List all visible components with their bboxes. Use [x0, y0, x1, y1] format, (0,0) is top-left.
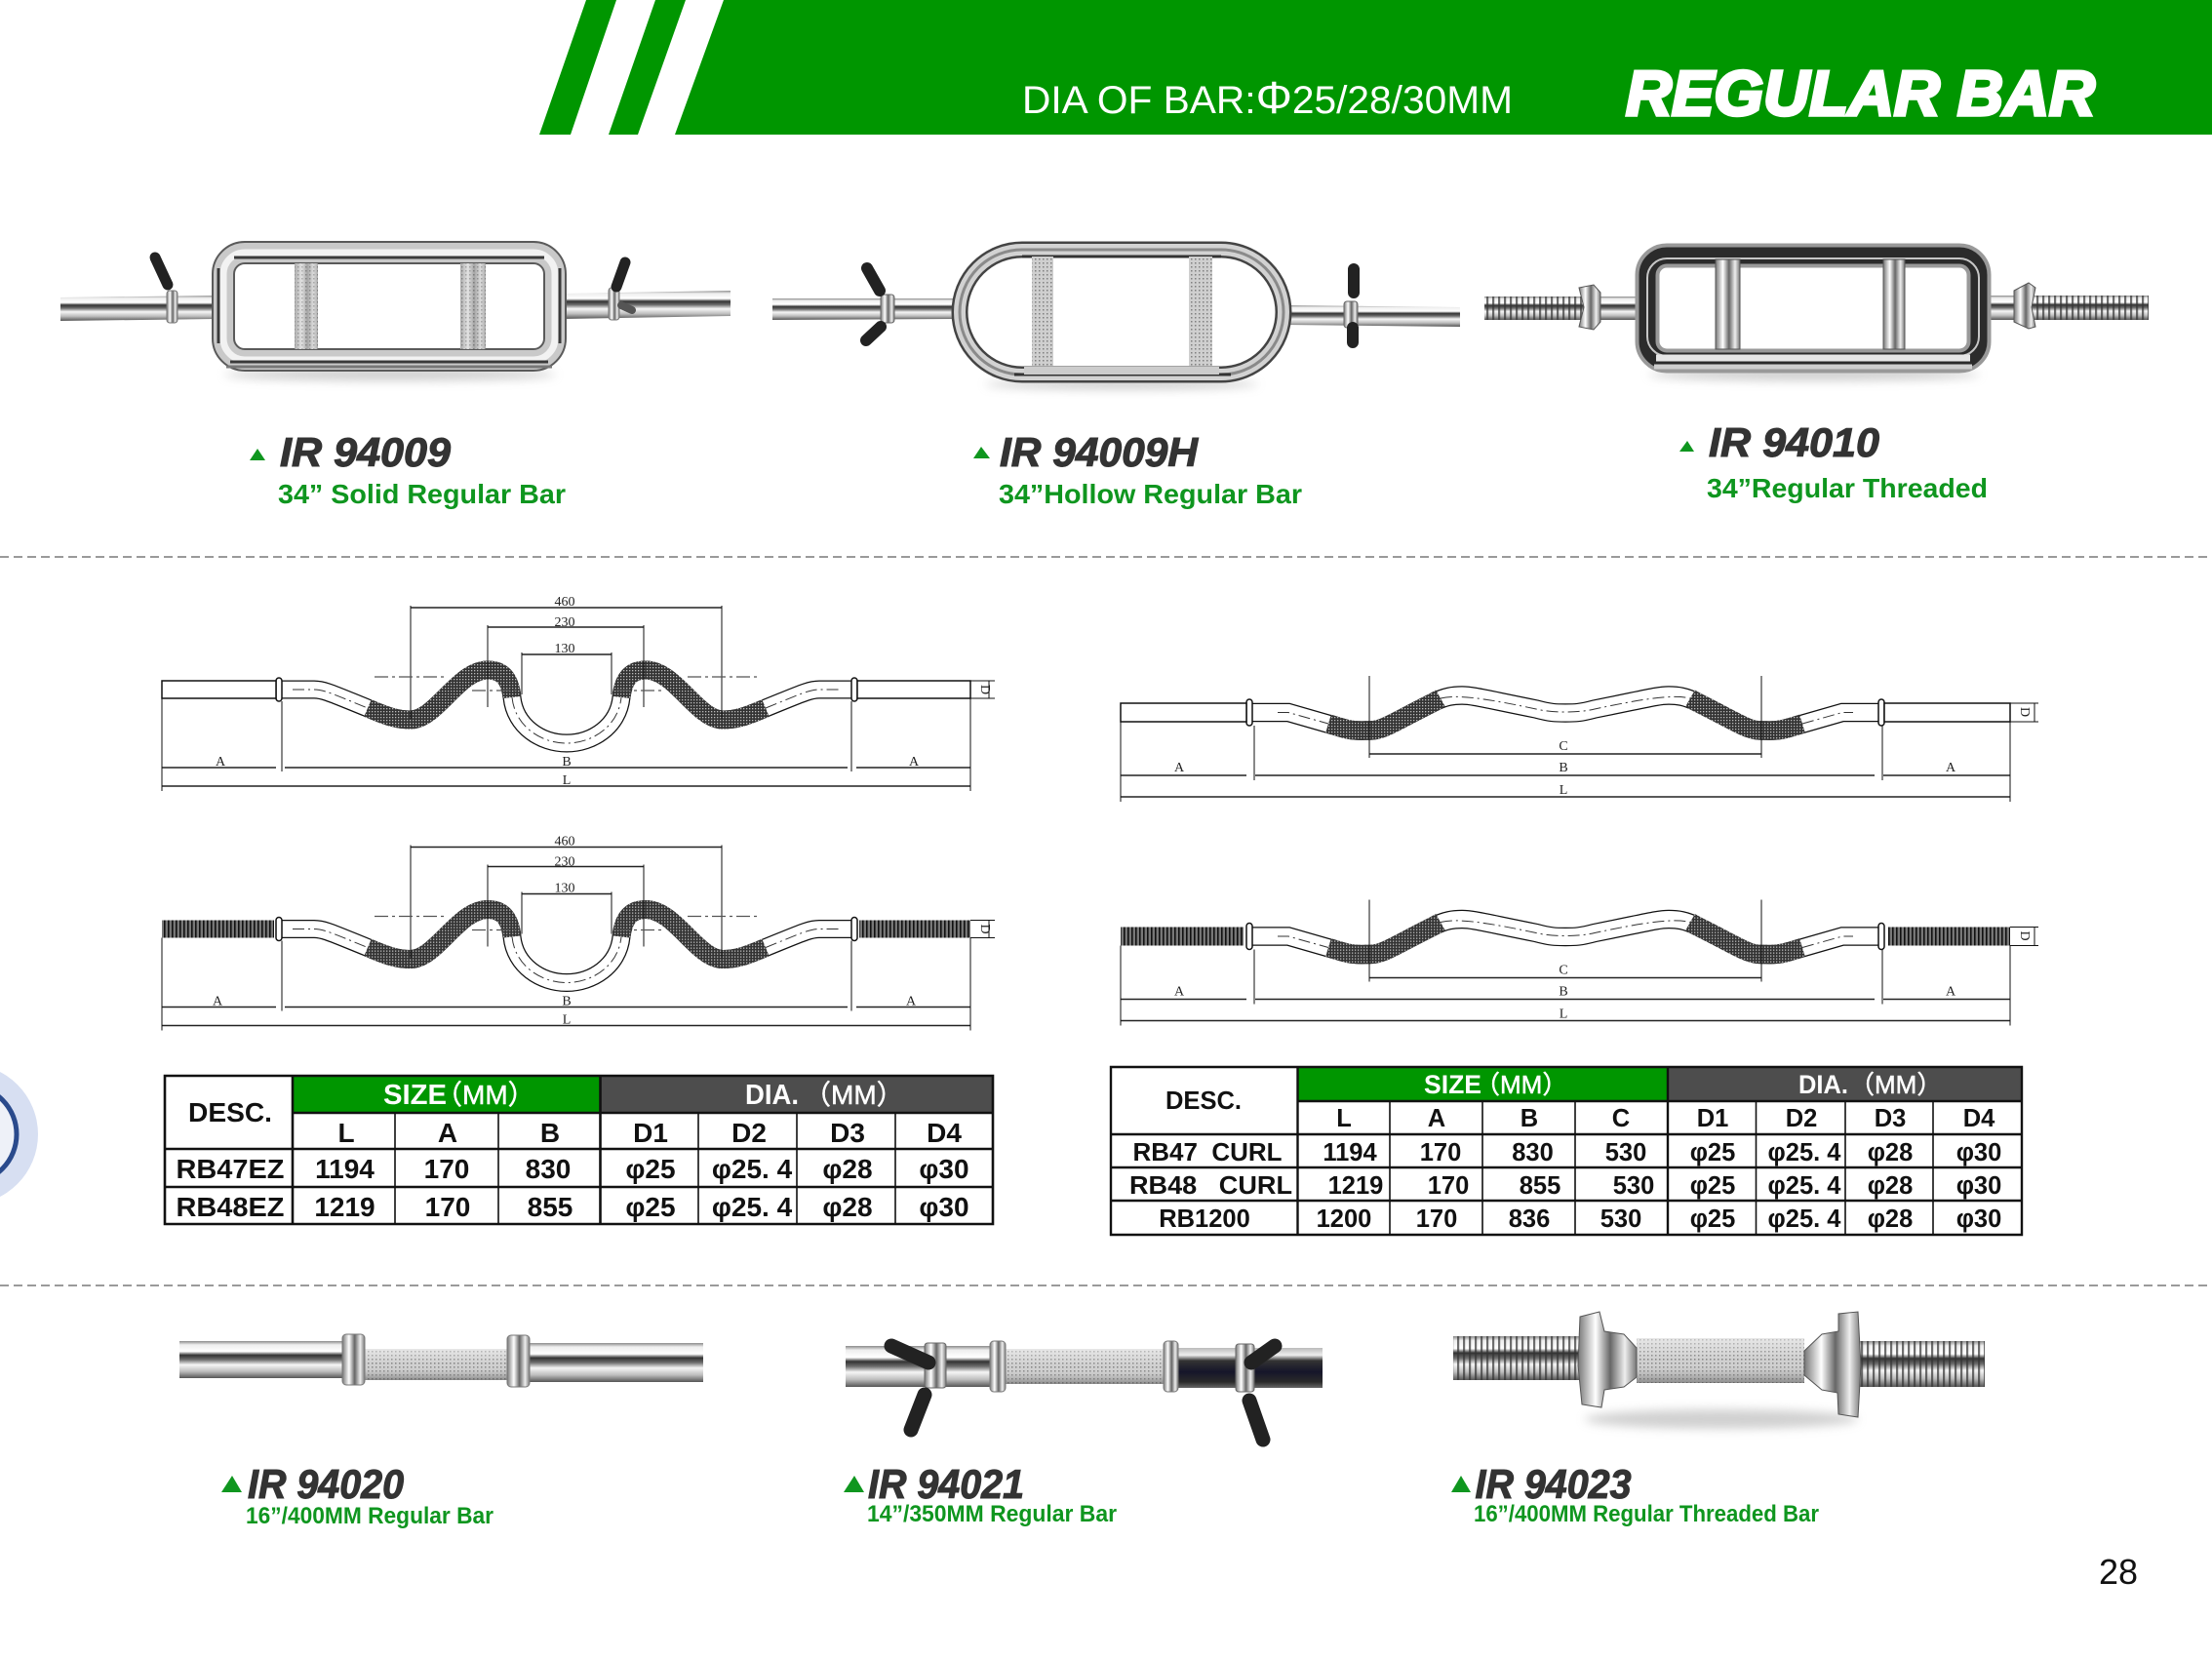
row RB47EZ: 170	[424, 1154, 469, 1184]
left sleeve	[1121, 703, 1246, 722]
row RB48EZ	[176, 1192, 969, 1222]
A labels: A	[213, 995, 223, 1008]
column labels: D2	[731, 1118, 767, 1148]
row RB48EZ: RB48EZ	[176, 1192, 285, 1222]
row RB48 CURL: 530	[1613, 1172, 1654, 1200]
column labels: DESC.	[188, 1097, 272, 1127]
row RB47EZ: φ25. 4	[712, 1154, 793, 1184]
row RB1200: 1200	[1317, 1205, 1371, 1233]
column labels: C	[1612, 1105, 1630, 1132]
table header cells: （MM）	[1849, 1070, 1942, 1099]
column labels: DESC.	[1165, 1087, 1242, 1115]
row RB47EZ: RB47EZ	[176, 1154, 285, 1184]
column labels: D2	[1786, 1105, 1817, 1132]
column labels: D3	[830, 1118, 865, 1148]
row RB1200	[1159, 1205, 2001, 1233]
product: IR 94010 label	[1679, 419, 1988, 503]
description: 16”/400MM Regular Bar	[246, 1503, 494, 1529]
page number: 28	[2099, 1552, 2138, 1592]
model number: IR 94021	[868, 1461, 1024, 1507]
row RB47 CURL	[1133, 1139, 2001, 1166]
row RB1200: φ25. 4	[1768, 1205, 1841, 1233]
column labels: B	[540, 1118, 560, 1148]
row RB48 CURL	[1129, 1172, 2001, 1200]
row RB1200: 530	[1600, 1205, 1641, 1233]
diagram: curl bar, threaded ends	[1121, 899, 2038, 1026]
row RB1200: φ28	[1868, 1205, 1913, 1233]
header banner	[539, 0, 2212, 135]
triangle marker	[250, 449, 265, 460]
row RB48 CURL: 855	[1520, 1172, 1560, 1200]
row RB47EZ: φ25	[625, 1154, 676, 1184]
right sleeve	[857, 681, 970, 698]
table header cells: SIZE	[1424, 1070, 1481, 1099]
A labels	[216, 755, 920, 770]
row RB47EZ: 1194	[315, 1154, 375, 1184]
A labels: A	[906, 995, 917, 1008]
description: 34” Solid Regular Bar	[278, 479, 566, 509]
column labels: B	[1521, 1105, 1538, 1132]
row RB47 CURL: 170	[1420, 1139, 1461, 1166]
product: IR 94021 bar photo	[846, 1341, 1323, 1440]
A labels: A	[216, 755, 226, 770]
row RB48 CURL: 170	[1428, 1172, 1469, 1200]
column labels: D4	[1963, 1105, 1995, 1132]
triangle marker	[221, 1476, 242, 1492]
triangle marker	[1451, 1476, 1471, 1492]
column labels: L	[337, 1118, 355, 1148]
diagram: EZ bar, threaded ends	[162, 835, 995, 1030]
row RB47EZ: φ28	[822, 1154, 873, 1184]
row RB47EZ: φ30	[919, 1154, 969, 1184]
table header cells: SIZE	[383, 1080, 447, 1111]
left sleeve	[162, 681, 276, 698]
description: 34”Hollow Regular Bar	[999, 479, 1302, 509]
A labels	[213, 995, 917, 1008]
table: EZ bar sizes	[165, 1076, 993, 1224]
column labels: D1	[633, 1118, 668, 1148]
row RB47 CURL: φ30	[1956, 1139, 2001, 1166]
row RB48EZ: φ30	[919, 1192, 969, 1222]
model number: IR 94023	[1475, 1461, 1631, 1507]
row RB47 CURL: RB47 CURL	[1133, 1139, 1282, 1166]
banner green block	[675, 0, 2212, 135]
product: IR 94010 bar photo	[1484, 256, 2149, 380]
row RB48EZ: φ25. 4	[712, 1192, 793, 1222]
table header cells: （MM）	[435, 1080, 535, 1110]
description: 14”/350MM Regular Bar	[867, 1501, 1117, 1527]
table header cells	[1297, 1067, 2022, 1101]
row RB1200: RB1200	[1159, 1205, 1250, 1233]
product: IR 94023 label	[1451, 1461, 1819, 1527]
description: 16”/400MM Regular Threaded Bar	[1474, 1501, 1819, 1527]
row RB48EZ: φ25	[625, 1192, 676, 1222]
A labels: A	[909, 755, 920, 770]
model number: IR 94009H	[1000, 429, 1200, 475]
banner stripes	[539, 0, 686, 135]
table header cells: DIA.	[745, 1080, 799, 1111]
row RB48EZ: 170	[425, 1192, 470, 1222]
product: IR 94021 label	[844, 1461, 1117, 1527]
product: IR 94009 label	[250, 429, 566, 509]
triangle marker	[973, 447, 990, 458]
left thread	[1121, 927, 1244, 946]
row RB47EZ: 830	[526, 1154, 571, 1184]
table: curl bar sizes	[1111, 1067, 2022, 1235]
column labels: D4	[927, 1118, 962, 1148]
model number: IR 94020	[248, 1461, 404, 1507]
column labels: D1	[1697, 1105, 1728, 1132]
product: IR 94009H label	[973, 429, 1302, 509]
column labels: D3	[1875, 1105, 1906, 1132]
right sleeve	[1884, 703, 2010, 722]
column labels: A	[438, 1118, 457, 1148]
right thread	[859, 921, 970, 938]
row RB1200: 836	[1509, 1205, 1550, 1233]
row RB47 CURL: 830	[1512, 1139, 1554, 1166]
table header cells	[293, 1076, 993, 1113]
row RB48EZ: φ28	[822, 1192, 873, 1222]
row RB1200: 170	[1416, 1205, 1457, 1233]
product: IR 94009H bar photo	[772, 250, 1460, 389]
product: IR 94009 bar photo	[60, 253, 731, 380]
diagram: EZ bar, plain ends	[162, 595, 995, 791]
table header cells: （MM）	[804, 1080, 904, 1110]
row RB1200: φ30	[1956, 1205, 2001, 1233]
model number: IR 94010	[1709, 419, 1879, 465]
row RB47 CURL: 530	[1605, 1139, 1646, 1166]
row RB47EZ	[176, 1154, 969, 1184]
triangle marker	[844, 1476, 864, 1492]
row RB48 CURL: RB48 CURL	[1129, 1172, 1292, 1200]
right thread	[1888, 927, 2010, 946]
row RB48EZ: 1219	[314, 1192, 375, 1222]
row RB48EZ: 855	[528, 1192, 573, 1222]
column labels: A	[1428, 1105, 1445, 1132]
row RB47 CURL: φ25	[1690, 1139, 1735, 1166]
table header cells: DIA.	[1798, 1070, 1848, 1099]
column labels: L	[1336, 1105, 1352, 1132]
banner title: REGULAR BAR	[1626, 58, 2095, 129]
banner diameter text: DIA OF BAR:Φ25/28/30MM	[1022, 72, 1513, 123]
row RB48 CURL: 1219	[1328, 1172, 1383, 1200]
diagram: curl bar, plain ends	[1121, 676, 2038, 802]
description: 34”Regular Threaded	[1707, 473, 1988, 503]
row RB48 CURL: φ25	[1690, 1172, 1735, 1200]
model number: IR 94009	[280, 429, 452, 475]
triangle marker	[1679, 441, 1694, 452]
table header cells: （MM）	[1475, 1070, 1567, 1099]
column labels	[1165, 1087, 1995, 1132]
row RB48 CURL: φ28	[1868, 1172, 1913, 1200]
product: IR 94020 bar photo	[179, 1334, 703, 1387]
row RB47 CURL: φ25. 4	[1768, 1139, 1841, 1166]
row RB1200: φ25	[1690, 1205, 1735, 1233]
row RB48 CURL: φ30	[1956, 1172, 2001, 1200]
product: IR 94020 label	[221, 1461, 494, 1529]
row RB47 CURL: 1194	[1323, 1139, 1377, 1166]
product: IR 94023 bar photo	[1453, 1312, 1985, 1429]
column labels	[188, 1097, 962, 1148]
row RB47 CURL: φ28	[1868, 1139, 1913, 1166]
left thread	[162, 921, 274, 938]
partial emblem disc at left edge	[0, 1064, 38, 1205]
row RB48 CURL: φ25. 4	[1768, 1172, 1841, 1200]
